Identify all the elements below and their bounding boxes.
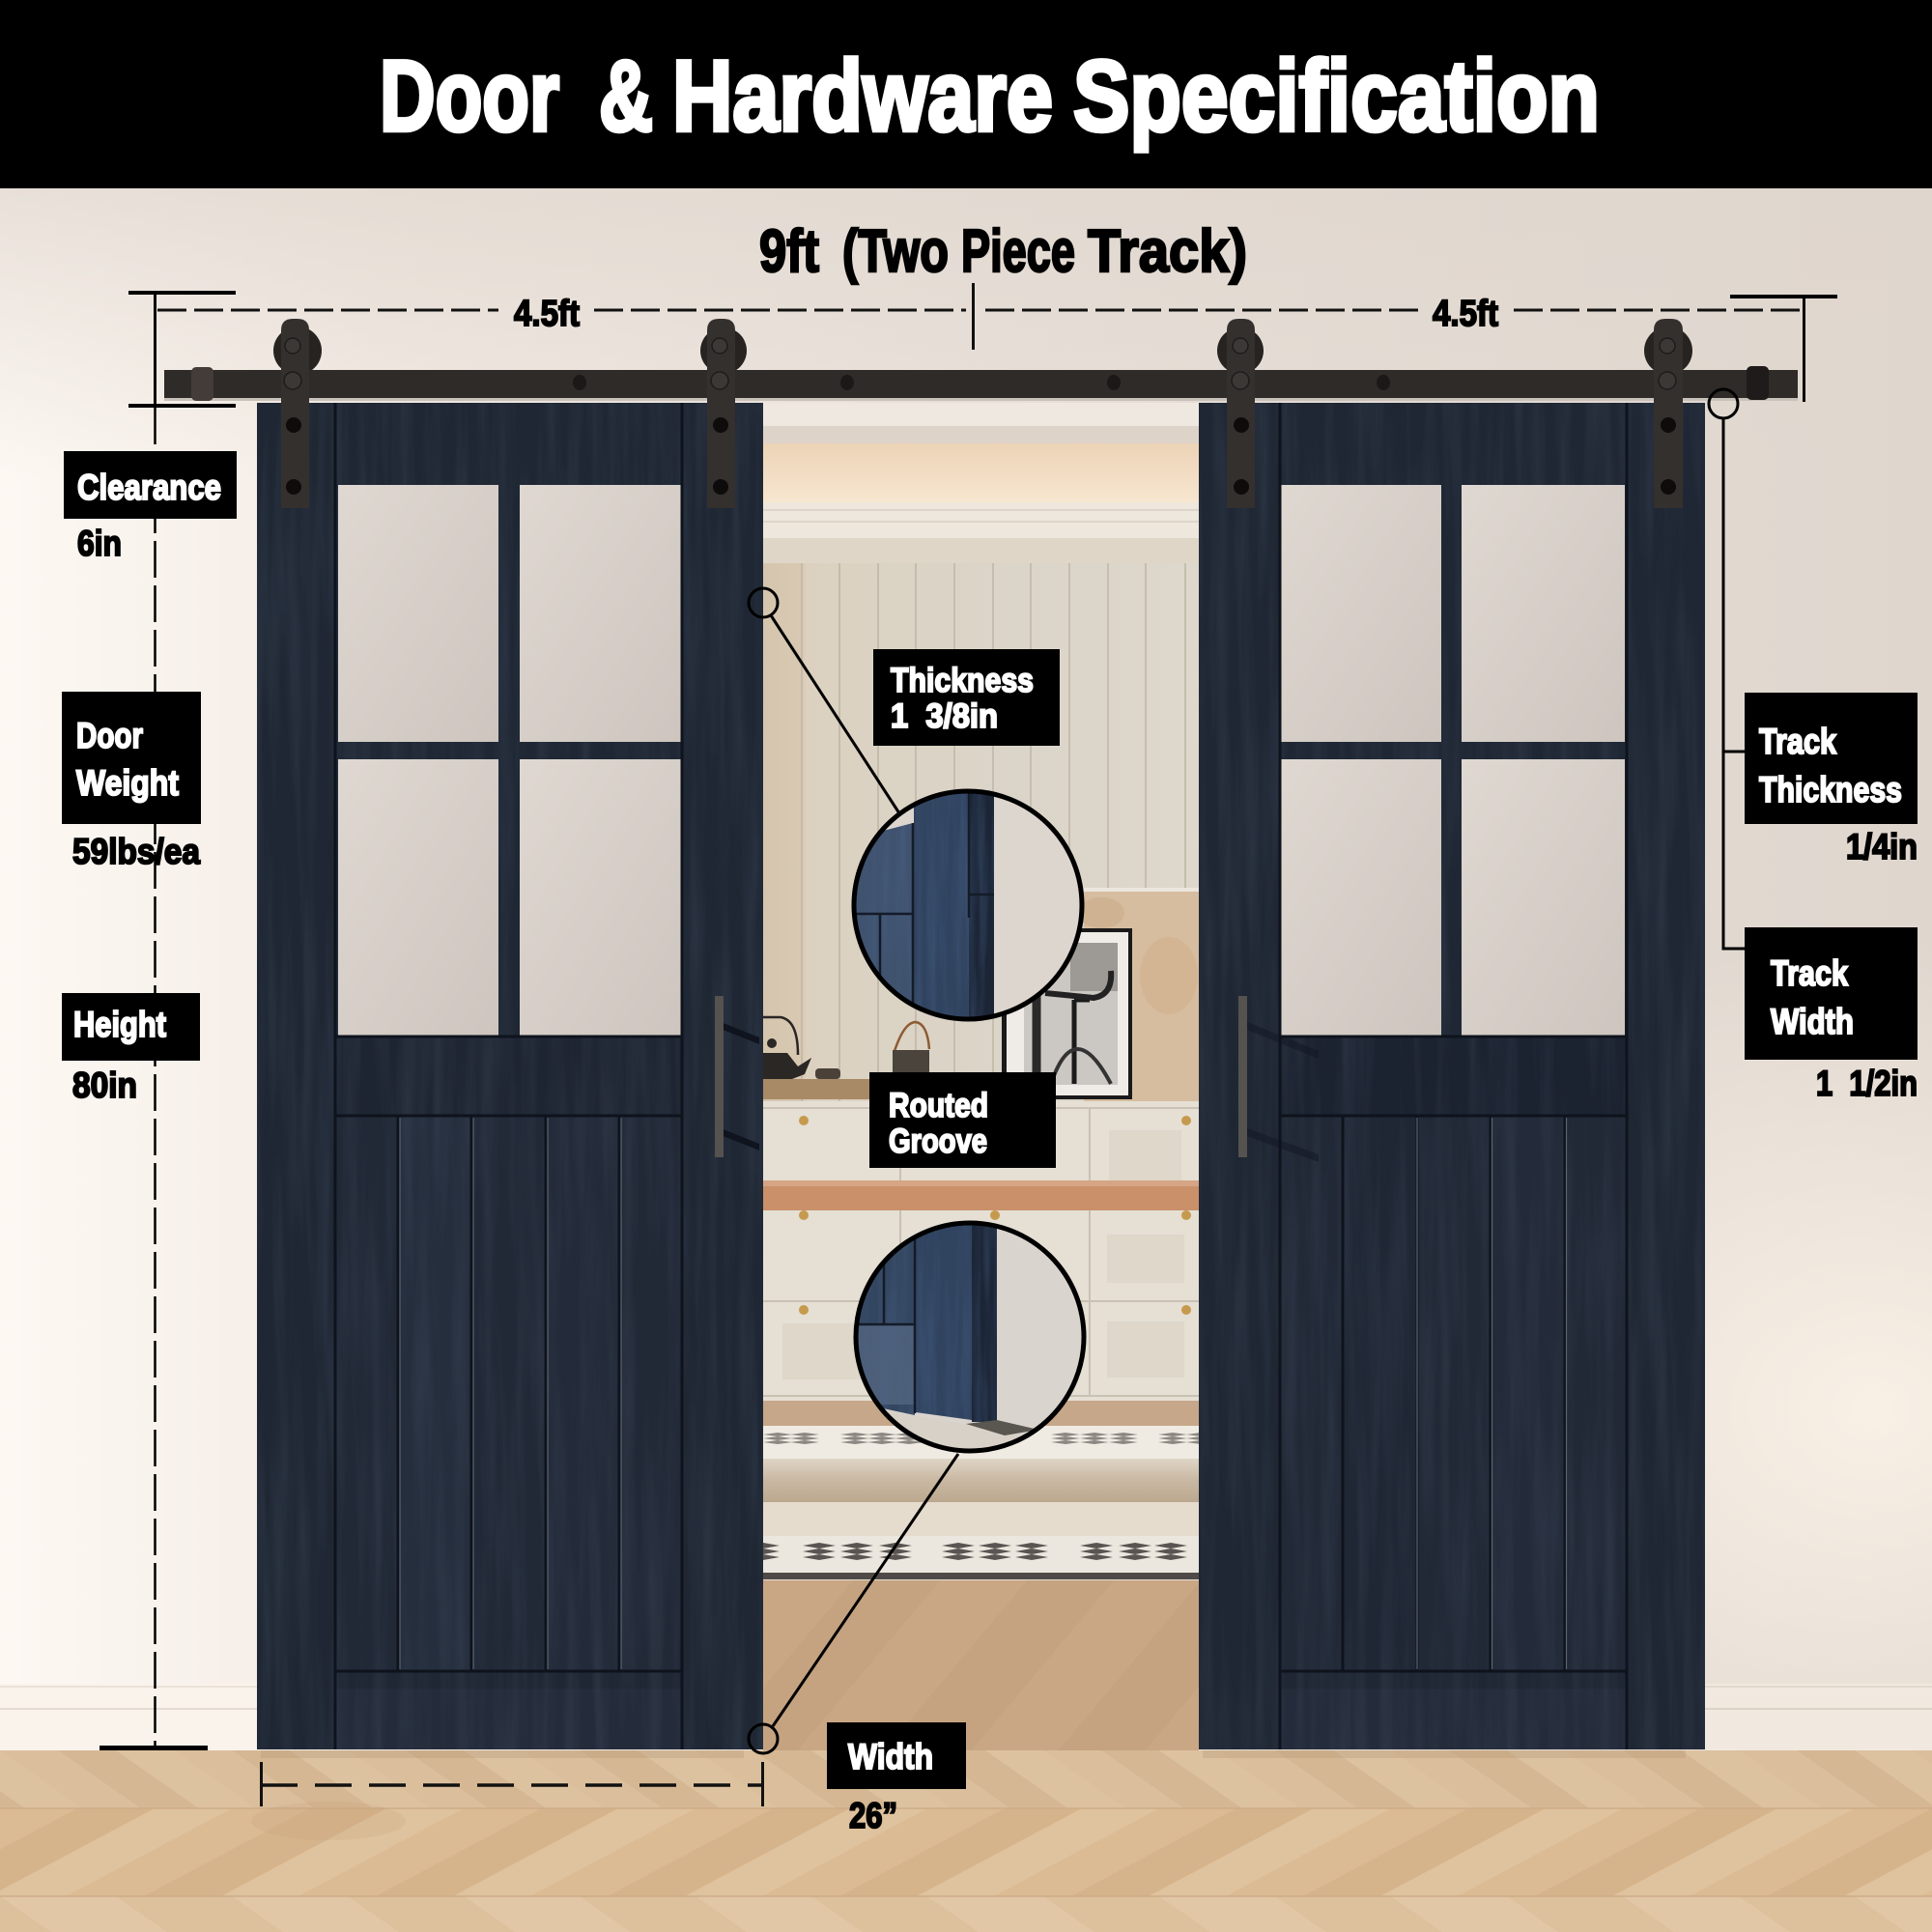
hanger straps — [281, 319, 1683, 508]
label: thickness — [873, 649, 1060, 746]
stone backsplash — [1078, 888, 1199, 1101]
interior room through doorway — [747, 403, 1215, 1750]
rug and floor — [747, 1401, 1215, 1750]
barn door track and hangers — [164, 319, 1798, 508]
header bar — [0, 0, 1932, 188]
label: track width: Width — [1771, 1002, 1854, 1041]
label: clearance — [64, 451, 237, 519]
title: Specification — [1073, 41, 1600, 153]
label: track thickness — [1745, 693, 1918, 824]
ceiling and moulding — [763, 403, 1199, 563]
label: height — [62, 993, 200, 1061]
left door — [257, 403, 763, 1749]
rail — [164, 370, 1798, 398]
right door — [1199, 403, 1705, 1749]
label: height: Height — [73, 1005, 166, 1044]
value: width: 26” — [849, 1796, 897, 1835]
glass panes — [1280, 485, 1625, 1037]
label: track width: Track — [1771, 953, 1848, 993]
dimension: overall track with 4.5ft segments: 4.5ft — [514, 294, 580, 334]
label: routed groove — [869, 1072, 1056, 1168]
label: width: Width — [848, 1737, 933, 1776]
value: 6in: 6in — [77, 524, 122, 563]
strap bolts — [286, 417, 1676, 495]
value: height: 80in — [72, 1065, 137, 1105]
dimension: clearance bracket — [128, 291, 236, 408]
wood countertop — [763, 1180, 1199, 1210]
magnifier: routed groove detail — [856, 1223, 1084, 1451]
kettles and tray — [763, 1017, 929, 1099]
dimension: door width — [260, 1762, 764, 1806]
label: track thickness: Track — [1759, 722, 1836, 761]
title: Door — [380, 41, 559, 153]
track length heading: 9ft — [759, 218, 819, 285]
label: track thickness: Thickness — [1759, 770, 1902, 810]
label: clearance: Clearance — [77, 468, 221, 507]
panel grooves — [335, 403, 682, 1749]
title — [380, 41, 1600, 153]
framed bicycle photo — [1002, 928, 1132, 1099]
label: width — [827, 1722, 966, 1789]
panel grooves — [1280, 403, 1627, 1749]
label: door weight: Door — [76, 716, 143, 755]
track length heading: Track) — [1088, 218, 1247, 285]
label: routed groove: Routed — [889, 1087, 988, 1124]
wheels — [273, 327, 1692, 375]
rail bolts — [573, 375, 1390, 390]
callout line and marker: track — [1709, 389, 1745, 949]
door handle — [1238, 996, 1319, 1162]
callout line and marker: routed groove — [749, 1454, 958, 1753]
rail stops — [191, 366, 1769, 401]
label: routed groove: Groove — [889, 1122, 987, 1160]
parquet floor — [0, 1750, 1932, 1932]
door handle — [715, 996, 759, 1157]
track length heading: (Two — [842, 218, 949, 285]
title: Hardware — [672, 41, 1053, 153]
label: track width — [1745, 927, 1918, 1060]
label: thickness: Thickness — [891, 662, 1034, 699]
dimension: overall track with 4.5ft segments: 4.5ft — [1433, 294, 1498, 334]
beadboard wall — [763, 563, 1199, 1104]
magnifier: door thickness detail — [854, 791, 1082, 1019]
dimension: door height line — [99, 408, 208, 1750]
glass panes — [338, 485, 681, 1037]
label: thickness: 1 3/8in — [891, 697, 998, 735]
dimension: right bracket — [1730, 295, 1837, 402]
value: door weight: 59lbs/ea — [72, 832, 200, 871]
track length heading — [759, 218, 1247, 285]
title: & — [599, 41, 653, 153]
label: door weight — [62, 692, 201, 824]
label: door weight: Weight — [76, 763, 179, 803]
kitchen cabinets — [763, 1101, 1199, 1401]
baseboard — [0, 1684, 1932, 1750]
track length heading: Piece — [961, 218, 1075, 285]
dimension: overall track with 4.5ft segments — [157, 283, 1802, 350]
value: track thickness: 1/4in — [1846, 827, 1918, 867]
callout line and marker: thickness — [749, 588, 899, 813]
